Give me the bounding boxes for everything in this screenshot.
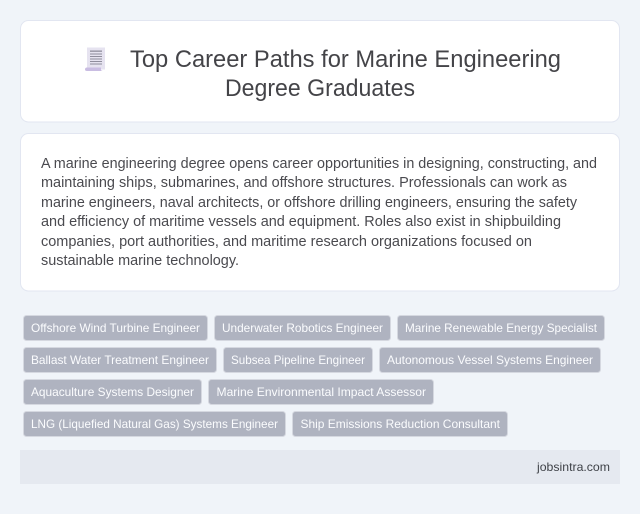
tag: Underwater Robotics Engineer xyxy=(214,316,390,340)
tag: Marine Environmental Impact Assessor xyxy=(208,380,434,404)
tag: Underwater Robotics Engineer: Underwater Robotics Engineer xyxy=(222,321,383,335)
description text xyxy=(41,156,597,269)
tag: LNG Systems Engineer: LNG (Liquefied Natural Gas) Systems Engineer xyxy=(31,417,278,431)
career tags xyxy=(24,316,604,436)
tag: Aquaculture Systems Designer xyxy=(24,380,202,404)
tag: Aquaculture Systems Designer: Aquaculture Systems Designer xyxy=(31,385,194,399)
header panel xyxy=(20,20,620,122)
title: Degree Graduates xyxy=(225,75,415,102)
tag: Marine Renewable Energy Specialist xyxy=(398,316,604,340)
title: Top Career Paths for Marine Engineering xyxy=(130,46,561,73)
description panel xyxy=(20,134,620,291)
tag: Offshore Wind Turbine Engineer xyxy=(24,316,208,340)
tag: Autonomous Vessel Systems Engineer: Autonomous Vessel Systems Engineer xyxy=(387,353,593,367)
description text: marine engineers, naval architects, or offshore drilling engineers, ensuring the safety xyxy=(41,195,578,211)
footer source: jobsintra.com xyxy=(536,460,610,474)
tag: Subsea Pipeline Engineer: Subsea Pipeline Engineer xyxy=(231,353,365,367)
tag: Ballast Water Treatment Engineer xyxy=(24,348,216,372)
description text: companies, port authorities, and maritime research organizations focused on xyxy=(41,234,532,250)
tag: Marine Environmental Impact Assessor: Marine Environmental Impact Assessor xyxy=(216,385,426,399)
tag: Marine Renewable Energy Specialist: Marine Renewable Energy Specialist xyxy=(405,321,598,335)
tag: Autonomous Vessel Systems Engineer xyxy=(380,348,600,372)
icon: paper scroll xyxy=(85,48,105,71)
tag: Subsea Pipeline Engineer xyxy=(224,348,372,372)
title xyxy=(130,46,561,102)
footer bar xyxy=(20,450,620,484)
tag: Ship Emissions Reduction Consultant: Ship Emissions Reduction Consultant xyxy=(300,417,501,431)
tag: Offshore Wind Turbine Engineer: Offshore Wind Turbine Engineer xyxy=(31,321,200,335)
description text: maintaining ships, submarines, and offshore structures. Professionals can work as xyxy=(41,175,567,191)
tag: Ship Emissions Reduction Consultant xyxy=(292,412,508,436)
description text: sustainable marine technology. xyxy=(41,253,239,269)
tag: Ballast Water Treatment Engineer: Ballast Water Treatment Engineer xyxy=(31,353,209,367)
description text: A marine engineering degree opens career opportunities in designing, constructing, and xyxy=(41,156,597,172)
tag: LNG Systems Engineer xyxy=(24,412,286,436)
description text: and efficiency of maritime vessels and equipment. Roles also exist in shipbuilding xyxy=(41,214,561,230)
